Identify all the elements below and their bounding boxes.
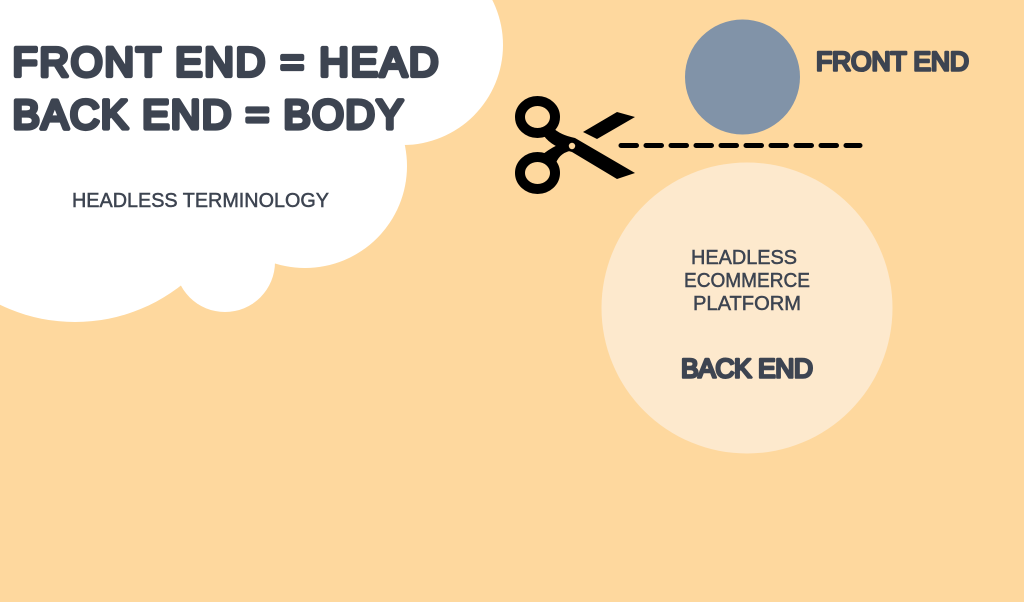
- label: back end: BACK END: [681, 354, 813, 384]
- text: headless ecommerce platform: HEADLESS: [691, 247, 797, 269]
- subtitle: headless terminology: HEADLESS TERMINOLOGY: [72, 189, 329, 212]
- panel: white cloud: [0, 0, 503, 322]
- dashed cut line: [621, 143, 860, 148]
- label: front end: FRONT END: [816, 46, 969, 76]
- text: headless ecommerce platform: ECOMMERCE: [684, 270, 810, 292]
- title: front end = head: FRONT END = HEAD: [12, 39, 438, 85]
- text: headless ecommerce platform: PLATFORM: [693, 293, 801, 315]
- front end circle: [685, 20, 800, 134]
- back end circle: [602, 162, 892, 454]
- title: back end = body: BACK END = BODY: [12, 92, 404, 138]
- icon: scissors: [520, 101, 635, 189]
- text: headless ecommerce platform: [684, 247, 810, 315]
